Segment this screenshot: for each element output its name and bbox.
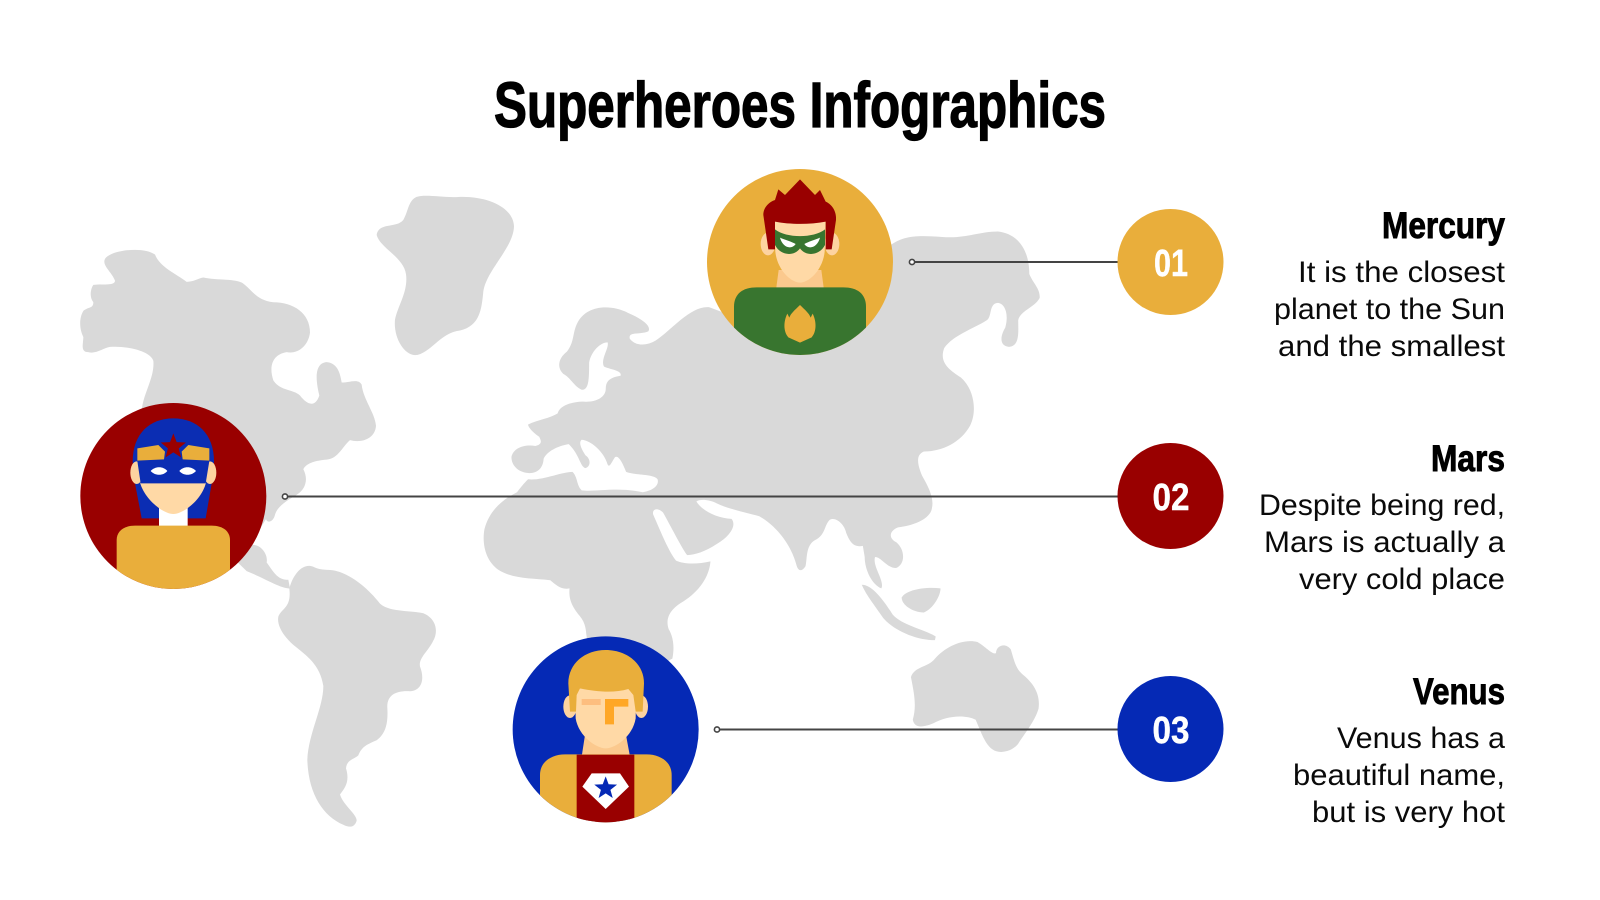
description: Mercury: It is the closest [1298, 256, 1506, 289]
description: Mars: very cold place [1299, 563, 1505, 596]
world map [80, 196, 1040, 827]
description: Mars: Mars is actually a [1264, 526, 1505, 559]
description: Mars [1259, 489, 1505, 596]
text block: Venus [1293, 671, 1506, 829]
connector: hero 1 to 01 [909, 259, 1120, 265]
heading: Mercury: Mercury [1382, 205, 1505, 246]
text block: Mars [1259, 438, 1505, 596]
badge 03: 03 [1152, 710, 1190, 752]
Eurasia and Africa [484, 231, 1040, 666]
connector: hero 2 to 02 [282, 494, 1120, 499]
icon: green masked hero on yellow circle [707, 169, 893, 360]
heading: Mars: Mars [1431, 438, 1505, 479]
Indonesia [862, 585, 936, 640]
South America [278, 566, 436, 827]
badge 01: 01 [1154, 243, 1188, 285]
description: Mars: Despite being red, [1259, 489, 1505, 522]
Australia [911, 641, 1039, 752]
text block: Mercury [1274, 205, 1506, 363]
badge 01 [1118, 209, 1224, 315]
Borneo [902, 588, 941, 612]
icon: blue masked hero on red circle [80, 403, 266, 600]
description: Venus: Venus has a [1337, 722, 1505, 755]
description: Venus: beautiful name, [1293, 759, 1505, 792]
title: Superheroes Infographics [494, 69, 1106, 141]
badge 03 [1118, 676, 1224, 782]
description: Mercury: planet to the Sun [1274, 293, 1505, 326]
badge 02 [1118, 443, 1224, 549]
connector: hero 3 to 03 [714, 727, 1120, 732]
description: Venus [1293, 722, 1506, 829]
North America [80, 250, 376, 588]
description: Mercury: and the smallest [1278, 330, 1506, 363]
description: Venus: but is very hot [1312, 796, 1506, 829]
Greenland [377, 196, 514, 355]
heading: Venus: Venus [1413, 671, 1505, 712]
icon: blond hero on blue circle [513, 636, 699, 830]
badge 02: 02 [1152, 477, 1190, 519]
description: Mercury [1274, 256, 1506, 363]
